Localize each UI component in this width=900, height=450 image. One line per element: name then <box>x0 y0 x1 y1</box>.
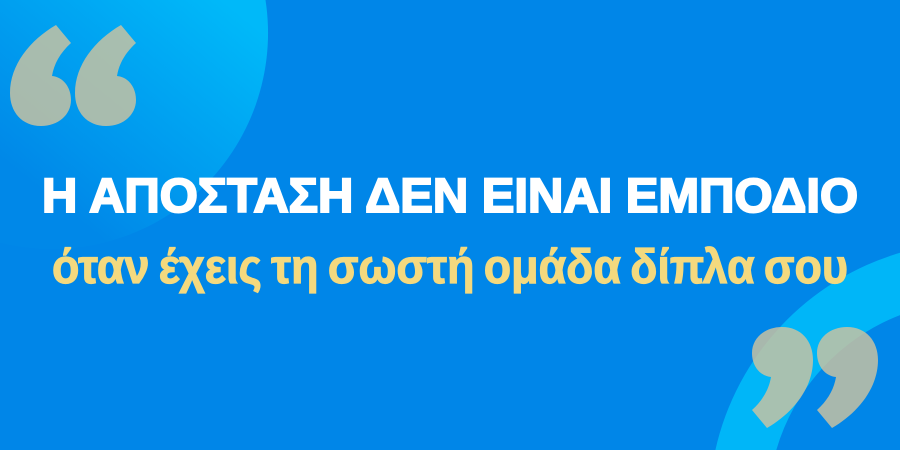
heading: Η ΑΠΟΣΤΑΣΗ ΔΕΝ ΕΙΝΑΙ ΕΜΠΟΔΙΟ <box>42 170 858 223</box>
decorative ring bottom right <box>715 253 900 450</box>
subheading: όταν έχεις τη σωστή ομάδα δίπλα σου <box>52 239 848 294</box>
decorative circle top left <box>0 0 268 249</box>
icon: closing quotation mark <box>752 327 878 428</box>
icon: opening quotation mark <box>10 25 136 126</box>
